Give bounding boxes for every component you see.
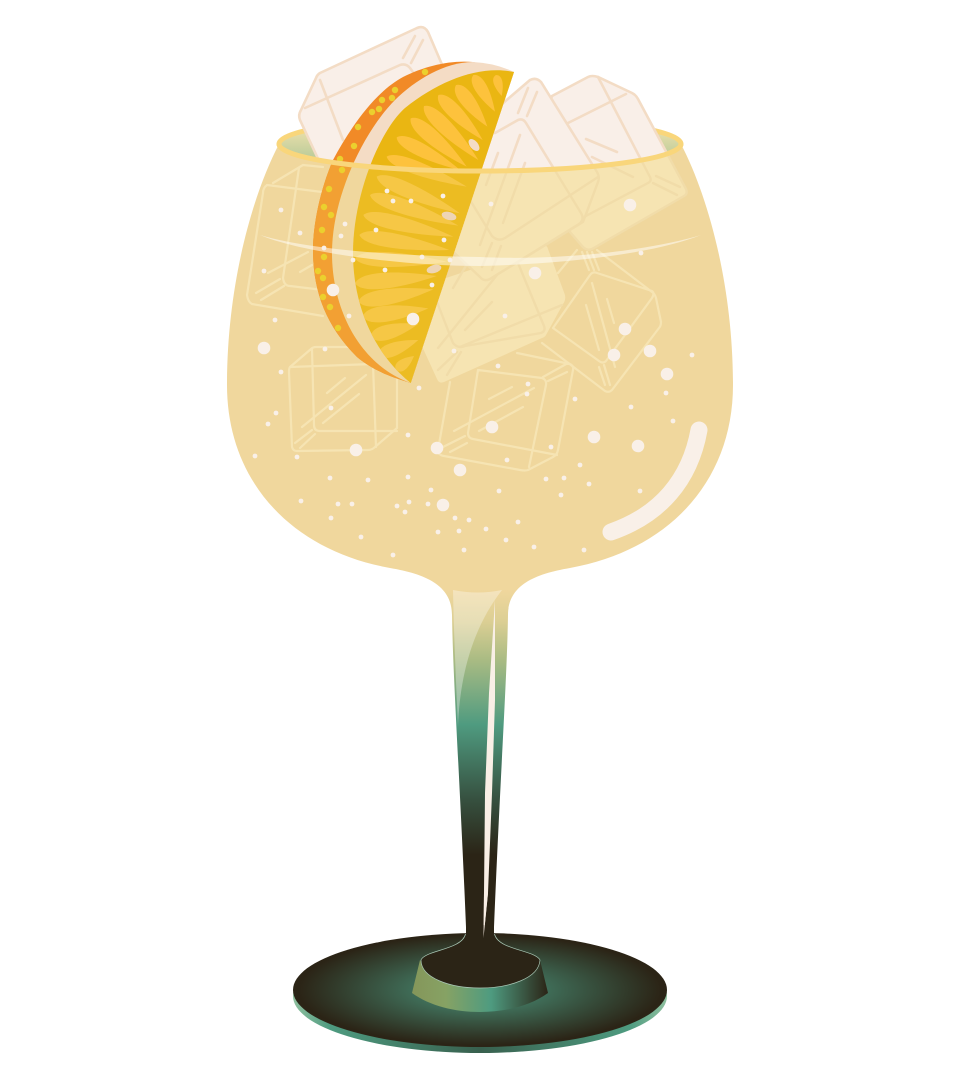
glass rim, front edge	[279, 144, 681, 171]
submerged ice cubes, filled	[422, 156, 688, 382]
orange below the waterline	[313, 164, 480, 383]
orange seed, top	[466, 137, 482, 153]
stem highlight, left sweep	[453, 590, 502, 727]
ice cube: upper left	[247, 165, 323, 316]
foot band	[412, 960, 548, 1012]
ice cube: lower centre	[438, 353, 573, 470]
stem highlight, lower tip	[484, 893, 488, 938]
foot outline	[421, 934, 540, 988]
ice cube: top left	[299, 27, 470, 175]
ice cube: lower left	[289, 347, 397, 451]
ice cube: top right	[530, 76, 687, 250]
orange pith	[332, 62, 514, 383]
orange seeds, submerged	[426, 210, 457, 275]
foot	[421, 925, 540, 988]
orange segments	[354, 72, 506, 374]
ice cube: top centre	[430, 79, 599, 280]
small bubbles	[253, 189, 694, 557]
submerged ice cubes, outline only	[247, 165, 661, 470]
glass rim, back edge	[279, 117, 681, 171]
bowl highlight	[611, 430, 699, 532]
ice cube: lower right	[542, 250, 661, 392]
ice cube: middle low	[410, 245, 565, 383]
base top	[293, 933, 667, 1047]
base edge	[293, 939, 667, 1053]
rind pores	[315, 69, 428, 331]
orange rind	[313, 62, 514, 383]
glass base	[293, 925, 667, 1053]
glass bowl and stem	[227, 144, 733, 940]
liquid surface band	[260, 235, 701, 266]
large bubbles	[258, 199, 673, 511]
ice cube: right submerged	[569, 156, 688, 250]
ice cubes above the rim	[299, 27, 687, 280]
ice cube: centre submerged	[454, 169, 600, 281]
orange flesh	[353, 70, 514, 383]
stem highlight, thin line	[484, 600, 495, 938]
orange wedge	[313, 62, 514, 383]
